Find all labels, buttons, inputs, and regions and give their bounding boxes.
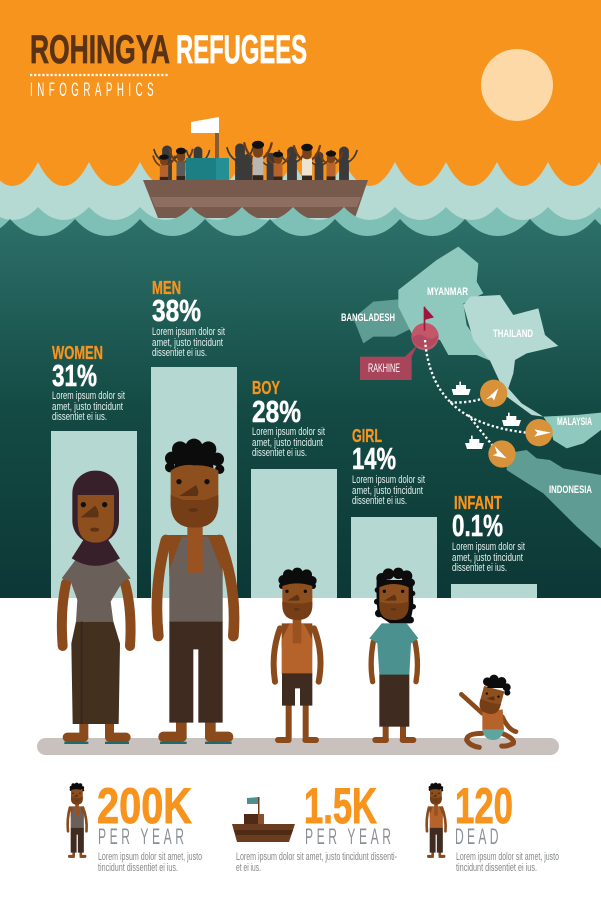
icon: sun [481, 49, 553, 121]
bar: boy [251, 469, 337, 598]
route markers [480, 380, 553, 468]
stat: infant [452, 492, 525, 574]
stat: men [152, 277, 225, 359]
stat: 1.5K per year: Lorem ipsum dolor sit amet, justo tincidunt dissenti- [236, 851, 397, 863]
ground shadow [37, 738, 559, 755]
map labels: THAILAND [493, 328, 533, 340]
stat: men: MEN [152, 277, 181, 298]
map [341, 247, 601, 548]
figure: man [157, 439, 234, 744]
bar: girl [351, 517, 437, 598]
subtitle: INFOGRAPHICS [30, 80, 158, 101]
stat: boy: amet, justo tincidunt [252, 437, 323, 449]
stat: 1.5K per year [232, 777, 397, 874]
map labels: MYANMAR [427, 286, 468, 298]
bar: men [151, 367, 237, 598]
icon: man in orange [427, 783, 446, 858]
stat: women: dissentiet ei ius. [52, 411, 107, 423]
stat: women: Lorem ipsum dolor sit [52, 390, 125, 402]
bar: infant [451, 584, 537, 598]
stat: 200K per year: Lorem ipsum dolor sit amet, justo [98, 851, 202, 863]
stat: women: 31% [52, 358, 97, 393]
figure: baby [461, 675, 516, 747]
stat: girl [352, 425, 425, 507]
stat: 200K per year: tincidunt dissentiet ei ius. [98, 862, 178, 874]
stat: 120 dead [427, 777, 559, 874]
background: orange sky [0, 0, 601, 200]
stat: men: Lorem ipsum dolor sit [152, 326, 225, 338]
ship icons [452, 382, 521, 449]
stat: 1.5K per year: PER YEAR [305, 824, 395, 849]
stat: boy: Lorem ipsum dolor sit [252, 426, 325, 438]
stat: boy: 28% [252, 394, 301, 429]
stat: infant: dissentiet ei ius. [452, 562, 507, 574]
figure: girl [369, 568, 418, 743]
stat: infant: amet, justo tincidunt [452, 552, 523, 564]
map labels: RAKHINE [368, 361, 400, 375]
icon: boat [232, 797, 295, 842]
stat: 200K per year [68, 777, 202, 874]
boat with refugees [143, 117, 368, 218]
figure: boy [274, 568, 321, 743]
map labels [341, 286, 592, 496]
stat: 120 dead: 120 [455, 777, 513, 834]
stat: girl: dissentiet ei ius. [352, 495, 407, 507]
map labels: BANGLADESH [341, 312, 395, 324]
stat: women: amet, justo tincidunt [52, 401, 123, 413]
stat: 120 dead: tincidunt dissentiet ei ius. [456, 862, 537, 874]
cabin [186, 158, 229, 180]
stat: infant: 0.1% [452, 508, 503, 543]
icon: man [68, 783, 87, 858]
dark sea panel [0, 219, 601, 598]
stat: 200K per year: PER YEAR [98, 824, 188, 849]
back wave [0, 162, 601, 240]
title: ROHINGYA [30, 28, 170, 72]
figure: woman [62, 471, 131, 744]
stat: girl: Lorem ipsum dolor sit [352, 474, 425, 486]
stat: boy [252, 377, 325, 459]
bar: women [51, 431, 137, 598]
stat: men: dissentiet ei ius. [152, 347, 207, 359]
title: REFUGEES [176, 28, 307, 72]
stat: boy: dissentiet ei ius. [252, 447, 307, 459]
stat: girl: 14% [352, 441, 396, 476]
stat: boy: BOY [252, 377, 280, 398]
stat: women: WOMEN [52, 342, 103, 363]
hull [143, 180, 368, 218]
stat: girl: amet, justo tincidunt [352, 485, 423, 497]
flag [191, 117, 219, 160]
marker: Rakhine [360, 307, 439, 380]
route lines [425, 340, 527, 447]
stat: 1.5K per year: 1.5K [304, 777, 377, 834]
stat: men: amet, justo tincidunt [152, 337, 223, 349]
stat: 1.5K per year: et ei ius. [236, 862, 261, 874]
stat: 120 dead: DEAD [455, 824, 502, 849]
bar chart [51, 367, 537, 598]
middle wave [0, 207, 601, 245]
stat: women [52, 342, 125, 423]
map shapes [353, 247, 601, 548]
stat: men: 38% [152, 293, 201, 328]
crowd [153, 141, 357, 180]
stat: 200K per year: 200K [97, 777, 192, 834]
stat: girl: GIRL [352, 425, 382, 446]
stat: infant: Lorem ipsum dolor sit [452, 541, 525, 553]
stat: infant: INFANT [454, 492, 502, 513]
